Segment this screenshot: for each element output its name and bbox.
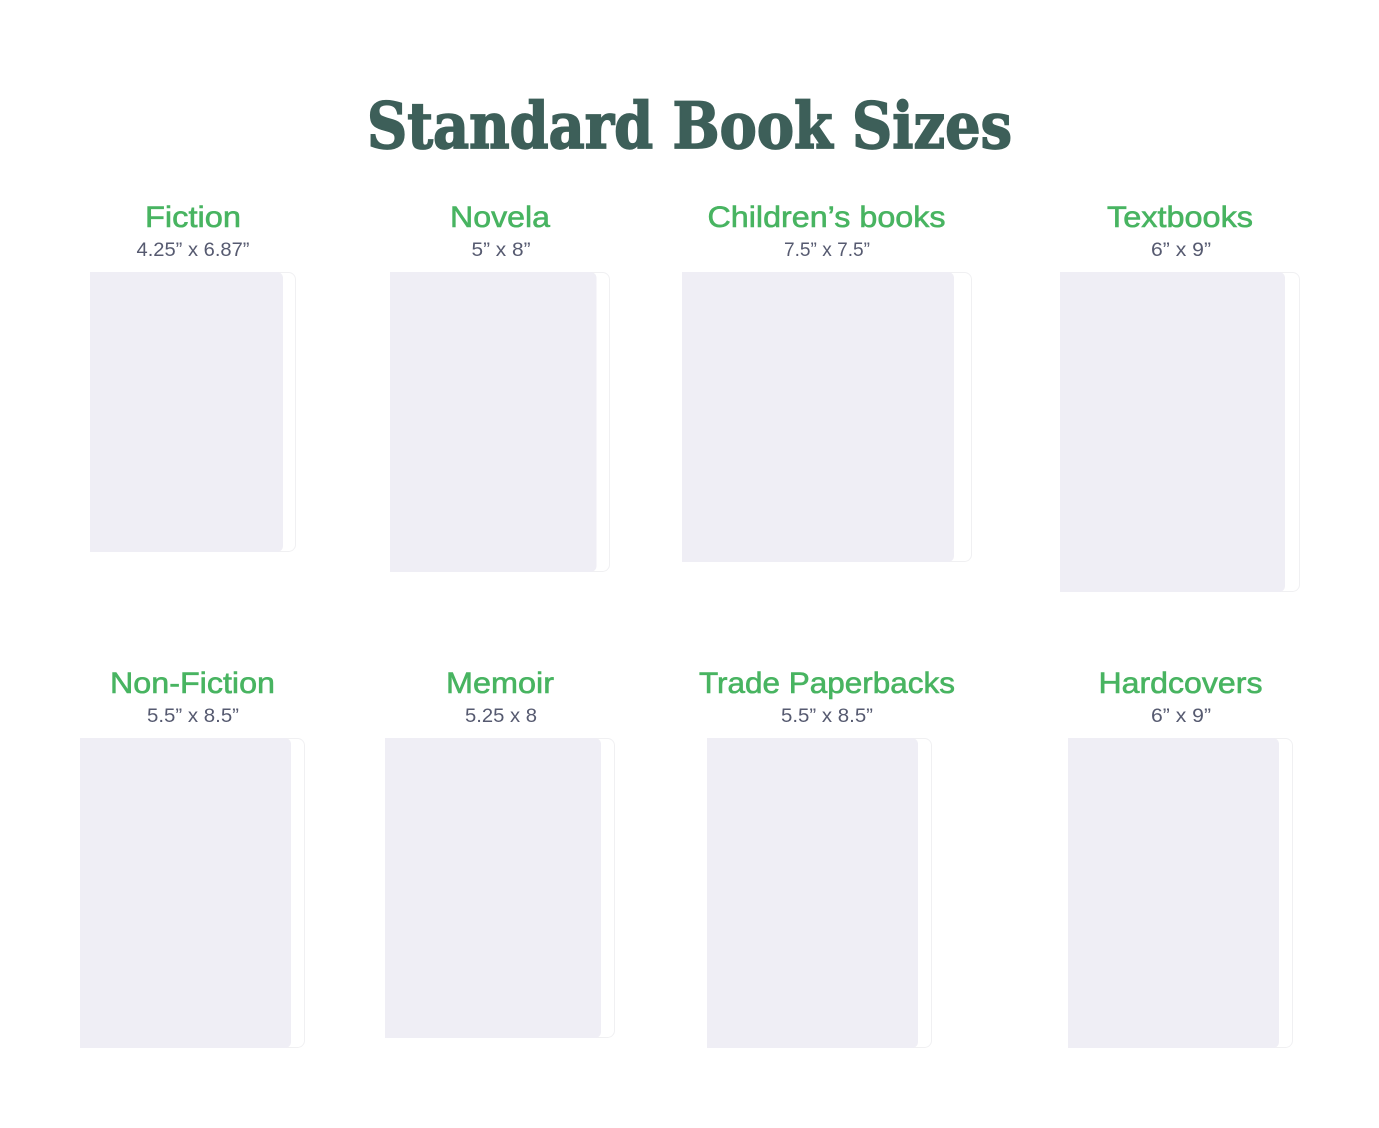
title: Standard Book Sizes (367, 89, 1012, 164)
heading: Fiction: Fiction (145, 201, 241, 234)
heading: Novela: Novela (450, 201, 550, 234)
book: Fiction (90, 272, 296, 552)
heading: Textbooks: Textbooks (1107, 201, 1253, 234)
panel: Trade Paperbacks (699, 667, 955, 1048)
panel: Textbooks (1060, 201, 1300, 592)
size: Non-Fiction: 5.5” x 8.5” (147, 705, 239, 727)
size: Novela: 5” x 8” (472, 239, 530, 261)
book: Memoir (385, 738, 614, 1038)
book: Novela (390, 272, 610, 572)
book: Children's books (682, 272, 972, 562)
book: Textbooks (1060, 272, 1300, 592)
size: Hardcovers: 6” x 9” (1151, 705, 1211, 727)
panel: Non-Fiction (80, 667, 304, 1048)
panel: Fiction (90, 201, 296, 552)
size: Children's books: 7.5” x 7.5” (784, 239, 870, 261)
size: Trade Paperbacks: 5.5” x 8.5” (781, 705, 873, 727)
size: Textbooks: 6” x 9” (1151, 239, 1211, 261)
book: Trade Paperbacks (707, 738, 932, 1048)
panel: Memoir (385, 667, 614, 1038)
heading: Hardcovers: Hardcovers (1098, 667, 1262, 700)
size: Memoir: 5.25 x 8 (465, 705, 537, 727)
heading: Memoir: Memoir (446, 667, 554, 700)
heading: Trade Paperbacks: Trade Paperbacks (699, 667, 955, 700)
panel: Novela (390, 201, 610, 572)
book: Non-Fiction (80, 738, 304, 1048)
heading: Non-Fiction: Non-Fiction (110, 667, 275, 700)
book: Hardcovers (1068, 738, 1292, 1048)
heading: Children's books: Children’s books (708, 201, 946, 234)
panel: Hardcovers (1068, 667, 1292, 1048)
size: Fiction: 4.25” x 6.87” (136, 239, 250, 261)
panel: Children's books (682, 201, 972, 562)
